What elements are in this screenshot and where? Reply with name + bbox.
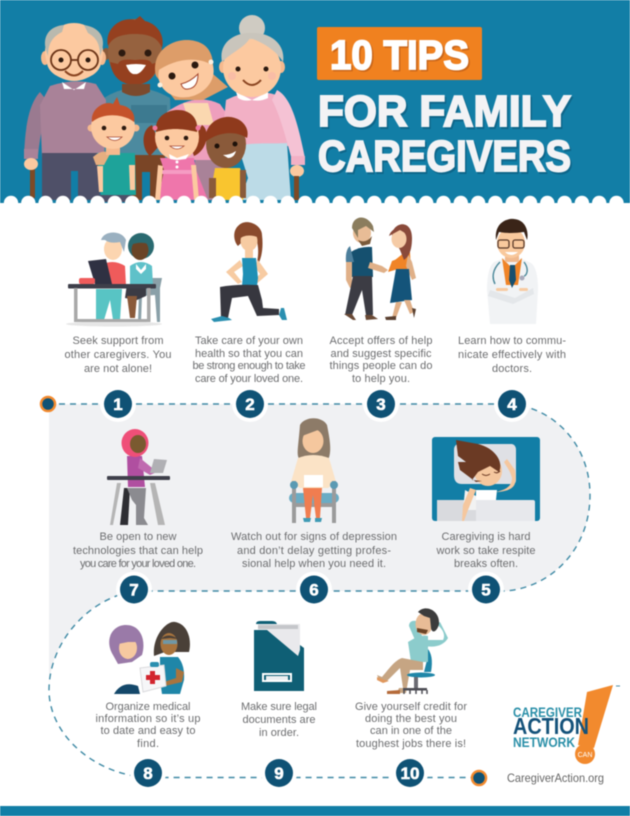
logo: caregiver action network: CAN bbox=[578, 752, 592, 759]
number 4 bbox=[494, 386, 530, 422]
grandma bbox=[219, 15, 305, 200]
number 9 bbox=[261, 755, 297, 791]
tip 8 text: to date and easy to bbox=[100, 725, 196, 737]
title: for family caregivers bbox=[318, 87, 572, 183]
number 5 bbox=[468, 572, 504, 608]
tip 4 text: Learn how to commu- bbox=[458, 335, 566, 347]
icon: two people at laptop bbox=[66, 232, 162, 326]
route start dot bbox=[41, 397, 55, 411]
title badge: 10 tips: 10 TIPS bbox=[332, 34, 470, 80]
tip 8 text: information so it’s up bbox=[96, 713, 200, 725]
icon: woman sitting with laptop bbox=[289, 418, 339, 523]
tip 6 text: Watch out for signs of depression bbox=[231, 531, 397, 543]
icon: two women with medical folder bbox=[109, 622, 190, 694]
illustration: family group bbox=[24, 15, 305, 202]
tip 6 text bbox=[231, 531, 397, 570]
tip 9 text: Make sure legal bbox=[241, 701, 317, 713]
logo: caregiver action network: ACTION bbox=[513, 713, 589, 739]
number 1: 1 bbox=[113, 395, 123, 414]
tip 5 text: breaks often. bbox=[454, 558, 518, 570]
icon: man and woman walking bbox=[344, 218, 416, 320]
gray path panel bbox=[49, 404, 590, 690]
tip 9 text bbox=[241, 701, 317, 739]
number 10: 10 bbox=[400, 764, 420, 783]
website url: CaregiverAction.org bbox=[507, 771, 604, 785]
tip 9 text: documents are bbox=[242, 714, 316, 726]
icon: doctor with stethoscope bbox=[487, 219, 538, 324]
number 2: 2 bbox=[245, 395, 255, 414]
number 3 bbox=[363, 386, 399, 422]
dad bbox=[102, 16, 172, 200]
tip 2 text: health so that you can bbox=[195, 348, 303, 360]
bottom band bbox=[0, 806, 630, 816]
mum bbox=[152, 40, 238, 200]
tip 8 text: Organize medical bbox=[106, 701, 190, 713]
tip 10 text bbox=[355, 701, 467, 750]
tip 1 text: Seek support from bbox=[72, 335, 164, 347]
tip 10 text: Give yourself credit for bbox=[355, 701, 467, 713]
number badges bbox=[100, 386, 530, 791]
title: for family caregivers: FOR FAMILY bbox=[318, 87, 571, 136]
tip 10 text: toughest jobs there is! bbox=[356, 738, 466, 750]
route end dot bbox=[472, 771, 486, 785]
number 2 bbox=[232, 386, 268, 422]
title: for family caregivers: CAREGIVERS bbox=[318, 132, 571, 181]
tip 4 text: doctors. bbox=[492, 363, 532, 375]
tip 6 text: and don’t delay getting profes- bbox=[237, 545, 391, 557]
tip 4 text: nicate effectively with bbox=[458, 349, 566, 361]
tip 10 text: can in one of the bbox=[370, 725, 452, 737]
girl in pink dress bbox=[144, 110, 208, 200]
tip 1 text: are not alone! bbox=[84, 363, 152, 375]
tip 6 text: sional help when you need it. bbox=[242, 558, 386, 570]
grandpa bbox=[24, 23, 106, 200]
tip 5 text: work so take respite bbox=[436, 545, 536, 557]
icon: woman doing lunge bbox=[211, 222, 287, 322]
tip 8 text: find. bbox=[137, 738, 159, 750]
tip 2 text: care of your loved one. bbox=[195, 373, 303, 385]
number 5: 5 bbox=[481, 580, 491, 600]
logo: caregiver action network bbox=[513, 685, 620, 764]
number 1 bbox=[100, 386, 136, 422]
scalloped edge bbox=[0, 196, 630, 210]
logo: caregiver action network: NETWORK bbox=[513, 735, 575, 750]
title: for family caregivers: CAREGIVERS bbox=[320, 134, 572, 183]
tip 10 text: doing the best you bbox=[365, 713, 457, 725]
logo: caregiver action network: CAREGIVER bbox=[513, 705, 582, 720]
boy in teal bbox=[88, 97, 140, 202]
number 4: 4 bbox=[507, 395, 517, 414]
number 7 bbox=[116, 572, 152, 608]
tip 3 text: and suggest specific bbox=[330, 348, 432, 360]
tip 5 text: Caregiving is hard bbox=[442, 531, 530, 543]
tip 5 text bbox=[436, 531, 536, 570]
title badge: 10 tips: 10 TIPS bbox=[330, 32, 469, 78]
number 8 bbox=[130, 755, 166, 791]
tip 4 text bbox=[458, 335, 566, 375]
icon: woman sleeping in bed bbox=[432, 437, 540, 521]
number 9: 9 bbox=[274, 764, 284, 783]
boy in yellow bbox=[205, 117, 248, 200]
tip 7 text: Be open to new bbox=[100, 531, 177, 543]
tip 9 text: in order. bbox=[259, 727, 299, 739]
header band bbox=[0, 0, 630, 204]
tip 8 text bbox=[96, 701, 200, 750]
icon: file folder bbox=[254, 621, 304, 691]
tip 3 text: to help you. bbox=[352, 373, 410, 385]
number 3: 3 bbox=[376, 395, 386, 414]
tip 3 text: things people can do bbox=[330, 360, 432, 372]
tip 1 text bbox=[64, 335, 172, 375]
tip 2 text bbox=[192, 335, 306, 385]
icon: man relaxing on chair bbox=[377, 608, 448, 694]
tip 2 text: be strong enough to take bbox=[192, 360, 306, 372]
tip 7 text bbox=[73, 531, 203, 570]
tip 7 text: you care for your loved one. bbox=[80, 558, 196, 570]
dashed route bbox=[48, 404, 590, 778]
tip 3 text: Accept offers of help bbox=[330, 335, 432, 347]
tip 7 text: technologies that can help bbox=[73, 545, 203, 557]
number 6: 6 bbox=[309, 580, 319, 600]
tip 3 text bbox=[330, 335, 432, 385]
number 10 bbox=[392, 755, 428, 791]
tip 2 text: Take care of your own bbox=[195, 335, 303, 347]
title: for family caregivers: FOR FAMILY bbox=[320, 89, 572, 138]
number 6 bbox=[296, 572, 332, 608]
number 7: 7 bbox=[129, 580, 139, 600]
icon: woman at standing desk bbox=[107, 429, 170, 525]
tip 1 text: other caregivers. You bbox=[64, 349, 172, 361]
number 8: 8 bbox=[143, 764, 153, 783]
